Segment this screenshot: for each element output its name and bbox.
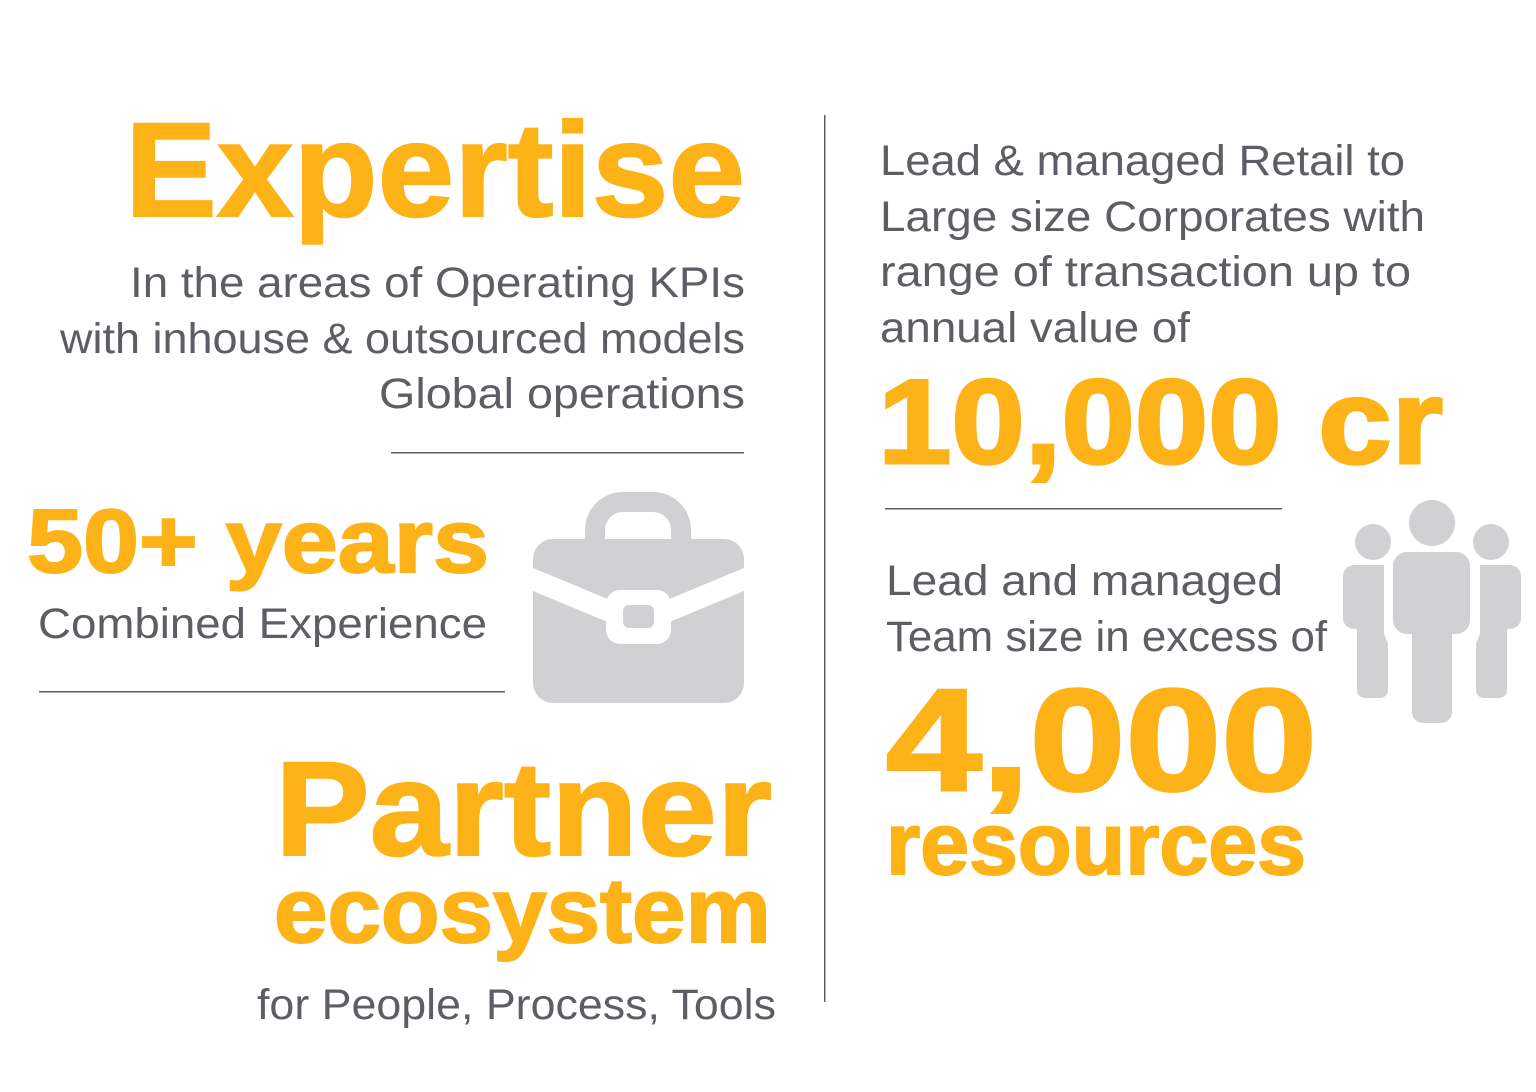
stat: 4,000: 4,000 — [886, 659, 1317, 821]
label: resources: resources — [886, 794, 1306, 893]
text block: team description — [886, 557, 1328, 661]
label: combined experience: Combined Experience — [38, 600, 487, 648]
text block: team description: Team size in excess of — [886, 613, 1328, 661]
heading: Expertise: Expertise — [125, 96, 745, 245]
heading: ecosystem: ecosystem — [274, 860, 771, 962]
text block: transaction description: Large size Corporates with — [880, 193, 1425, 241]
text block: transaction description: annual value of — [880, 304, 1191, 352]
icon: briefcase — [533, 492, 744, 703]
heading: Partner: Partner — [275, 735, 772, 884]
text block: transaction description: range of transaction up to — [880, 248, 1411, 296]
text block: transaction description: Lead & managed Retail to — [880, 137, 1405, 185]
text block: transaction description — [880, 137, 1425, 352]
panel: transactions — [878, 137, 1443, 489]
text block: expertise description: In the areas of Operating KPIs — [130, 259, 745, 307]
text block: expertise description: with inhouse & outsourced models — [59, 315, 745, 363]
text block: expertise description: Global operations — [379, 370, 745, 418]
text block: expertise description — [59, 259, 745, 418]
panel: experience — [27, 492, 744, 703]
stat: 10,000 cr: 10,000 cr — [878, 355, 1443, 489]
stat: 50+ years: 50+ years — [27, 492, 489, 592]
text block: team description: Lead and managed — [886, 557, 1283, 605]
icon: people — [1343, 500, 1521, 723]
panel: expertise — [59, 96, 745, 418]
panel: partner ecosystem — [257, 735, 776, 1029]
text: for people, process, tools: for People, Process, Tools — [257, 981, 776, 1029]
panel: team size — [886, 500, 1521, 893]
